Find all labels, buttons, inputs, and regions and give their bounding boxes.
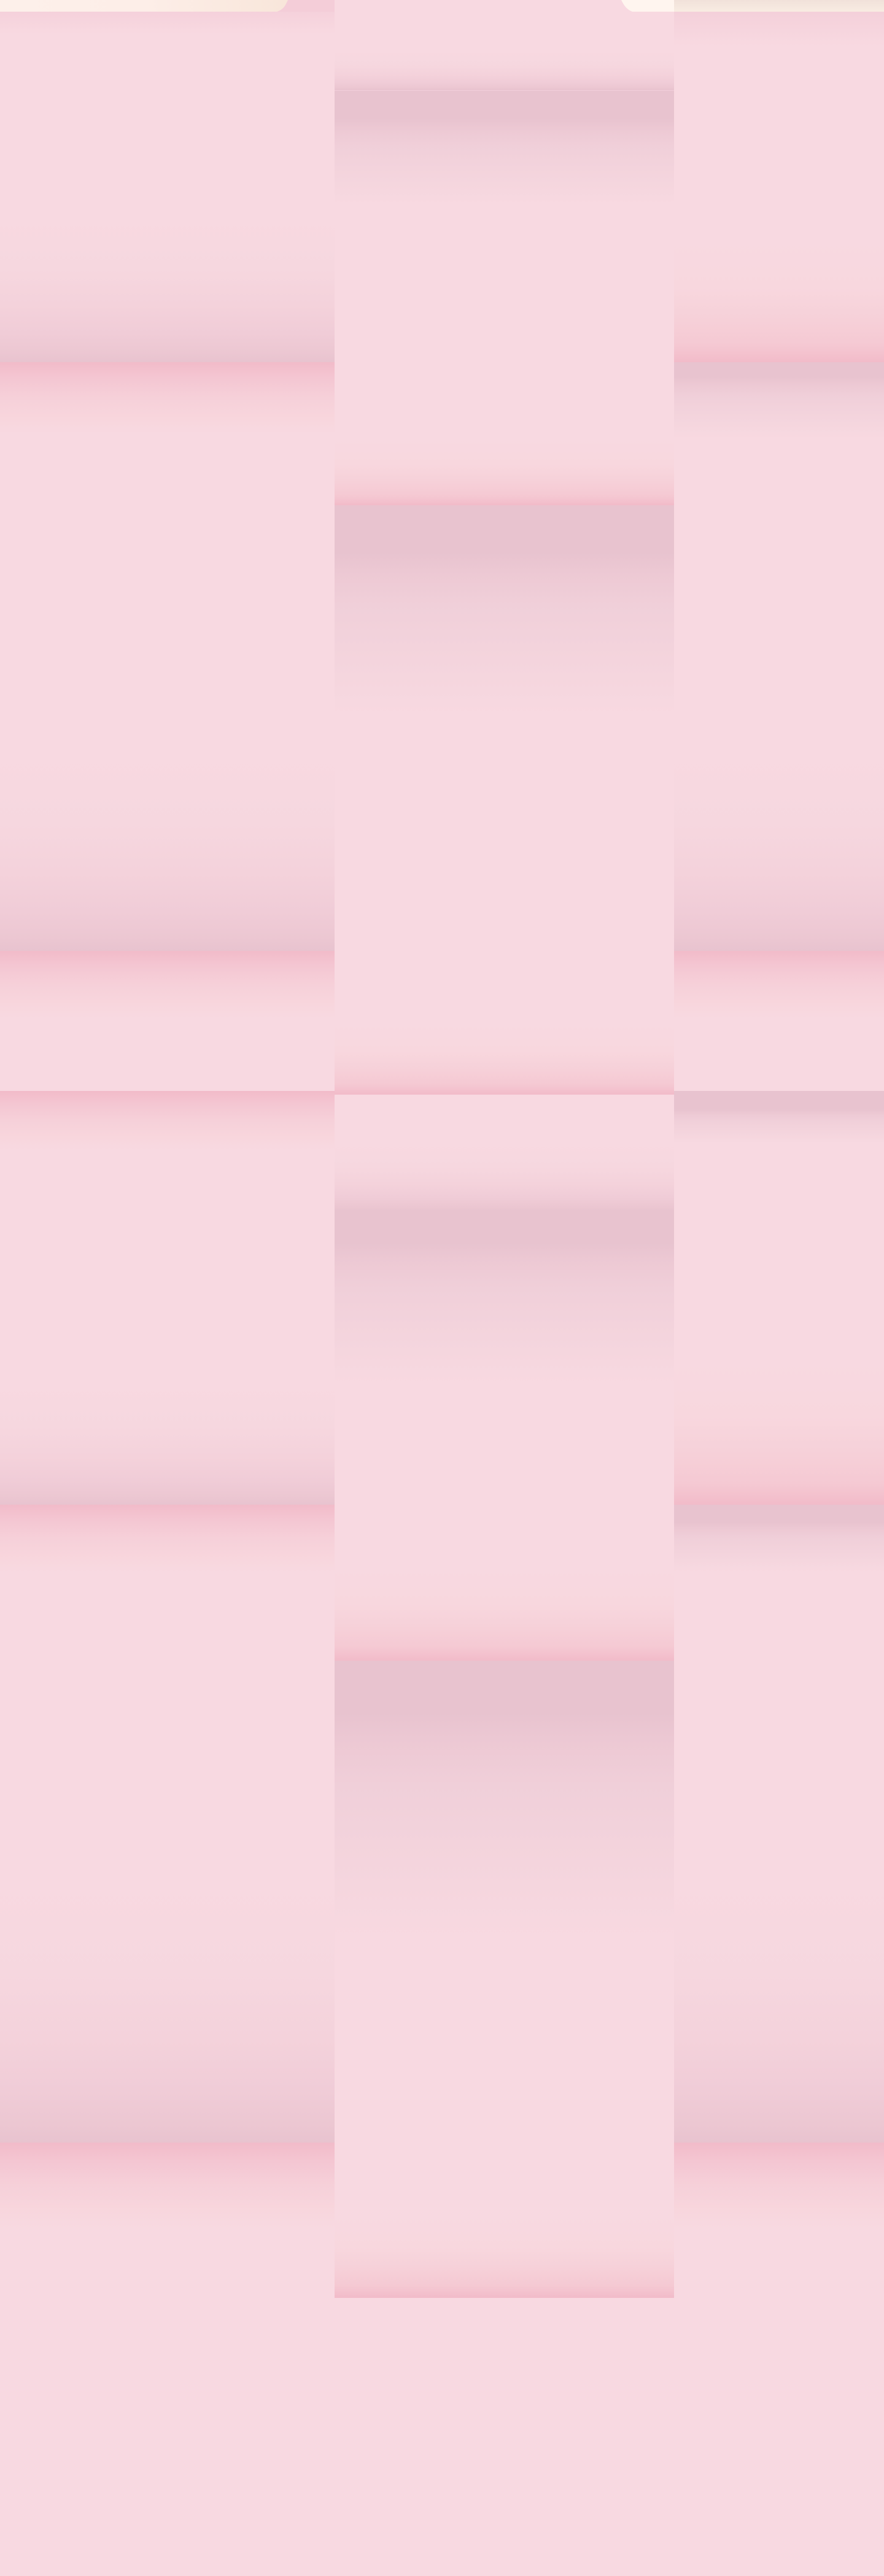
mauve fade-out band 3 — [335, 1243, 674, 1384]
mauve solid band 4 — [674, 1505, 884, 1523]
mauve fade-out band 1 — [335, 118, 674, 204]
top fade band — [0, 12, 335, 34]
mauve gradient band 2 — [674, 755, 884, 951]
mauve solid band 4 — [335, 1661, 674, 1713]
mauve gradient band 3 — [0, 1384, 335, 1505]
pink gradient band 1 — [0, 362, 335, 433]
mauve fade-out band 4 — [674, 1523, 884, 1572]
pink fade-in band 1 — [335, 440, 674, 505]
mauve fade-out band 1 — [674, 377, 884, 438]
pink gradient band 2 — [674, 951, 884, 1018]
top strip: cream shapes — [0, 0, 884, 12]
mauve solid band 1 — [674, 362, 884, 377]
column: right — [674, 12, 884, 2189]
mauve solid band 3 — [335, 1211, 674, 1243]
mauve solid band 3 — [674, 1091, 884, 1109]
pink fade-in band 4 — [335, 2216, 674, 2298]
column: centre — [335, 76, 674, 2298]
mauve fade-out band 2 — [335, 553, 674, 715]
pink gradient band 5 — [674, 2143, 884, 2228]
pink fade-in band 2 — [335, 1025, 674, 1095]
mauve fade-out band 3 — [674, 1109, 884, 1144]
mauve fade-in band 1 — [335, 51, 674, 90]
darker pink patch beside left cream — [277, 0, 335, 12]
pink gradient band 1 — [674, 242, 884, 362]
pink gradient band 2 — [0, 951, 335, 1018]
seam line — [335, 90, 674, 91]
pink gradient band 3 — [0, 1091, 335, 1150]
pink gradient band 4 — [0, 1505, 335, 1572]
mauve fade-in band 3 — [335, 1144, 674, 1211]
pink gradient band 5 — [0, 2143, 335, 2228]
mauve fade-out band 4 — [335, 1713, 674, 1938]
cream shape right — [674, 0, 884, 12]
mauve gradient band 4 — [0, 1884, 335, 2143]
column: left — [0, 310, 335, 2189]
white shape centre-right — [621, 0, 674, 12]
top fade band — [674, 12, 884, 46]
mauve solid band 2 — [335, 505, 674, 553]
mauve solid band 1 — [335, 90, 674, 118]
mauve gradient band 1 — [0, 219, 335, 362]
pink gradient band 3 — [674, 1362, 884, 1505]
mauve gradient band 5 — [674, 1884, 884, 2143]
mauve gradient band 2 — [0, 755, 335, 951]
cream shape left — [0, 0, 288, 12]
pink fade-in band 3 — [335, 1569, 674, 1661]
